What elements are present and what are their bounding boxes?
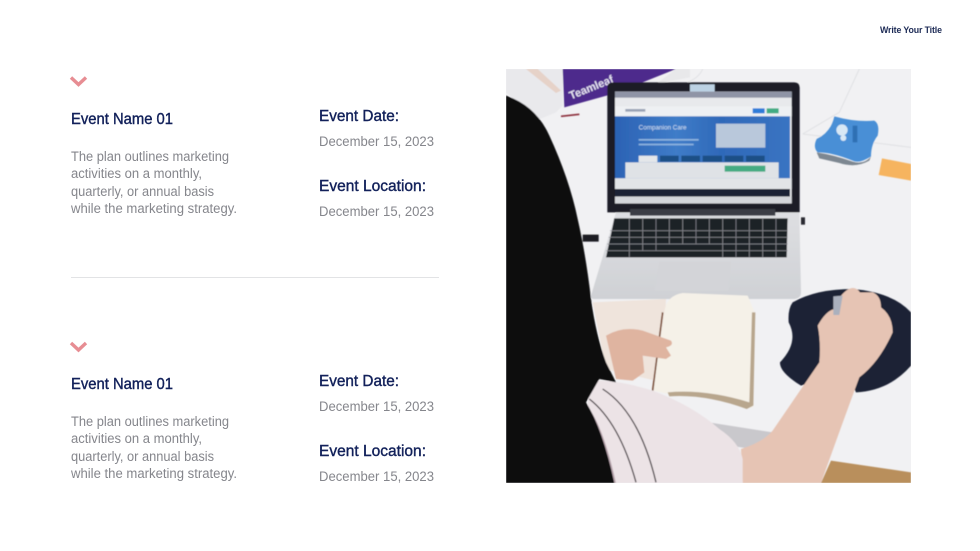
hand on notebook	[606, 329, 672, 381]
text block: description 2	[70, 414, 237, 481]
icon: chevron 1	[71, 78, 86, 84]
event location 2: December 15, 2023	[319, 469, 434, 484]
text block: description 2: activities on a monthly,	[71, 431, 202, 446]
wood floor	[821, 461, 911, 483]
text block: description 1: quarterly, or annual basis	[71, 184, 214, 199]
text block: description 1: activities on a monthly,	[71, 166, 202, 181]
text block: description 2: The plan outlines marketing	[71, 414, 229, 429]
heading: event name 2: Event Name 01	[71, 376, 173, 393]
laptop lid	[607, 82, 800, 212]
panel: event 2	[70, 343, 434, 484]
event location 1: December 15, 2023	[319, 204, 434, 219]
event location 2	[319, 443, 434, 484]
title: Write Your Title	[880, 25, 942, 35]
shirt	[583, 380, 743, 483]
event location 1: Event Location:	[319, 178, 426, 195]
event location 2: Event Location:	[319, 443, 426, 460]
panel: event 1	[70, 78, 434, 219]
blue device	[815, 116, 878, 162]
event location 1	[319, 178, 434, 219]
event date 1: December 15, 2023	[319, 134, 434, 149]
event date 2: December 15, 2023	[319, 399, 434, 414]
photo: person working at a laptop: Teamleaf	[568, 74, 616, 102]
sticky note	[879, 158, 911, 181]
event date 2: Event Date:	[319, 373, 399, 390]
notebook	[593, 299, 666, 382]
screen	[615, 92, 792, 203]
photo: person working at a laptop	[506, 69, 911, 483]
text block: description 1	[70, 149, 237, 216]
icon: chevron 2	[71, 343, 86, 350]
text block: description 1: while the marketing strategy.	[70, 201, 237, 216]
event date 1: Event Date:	[319, 108, 399, 125]
text block: description 2: while the marketing strategy.	[70, 466, 237, 481]
photo: person working at a laptop: Companion Care	[639, 124, 687, 131]
heading: event name 1: Event Name 01	[71, 111, 173, 128]
mouse pad	[780, 289, 911, 392]
desk	[506, 69, 911, 483]
long dark hair	[506, 96, 616, 483]
text block: description 1: The plan outlines marketing	[71, 149, 229, 164]
event date 1	[319, 108, 434, 149]
arm and hand on mouse	[741, 288, 893, 483]
text block: description 2: quarterly, or annual basis	[71, 449, 214, 464]
event date 2	[319, 373, 434, 414]
items top left	[506, 69, 563, 121]
laptop base	[591, 212, 801, 299]
